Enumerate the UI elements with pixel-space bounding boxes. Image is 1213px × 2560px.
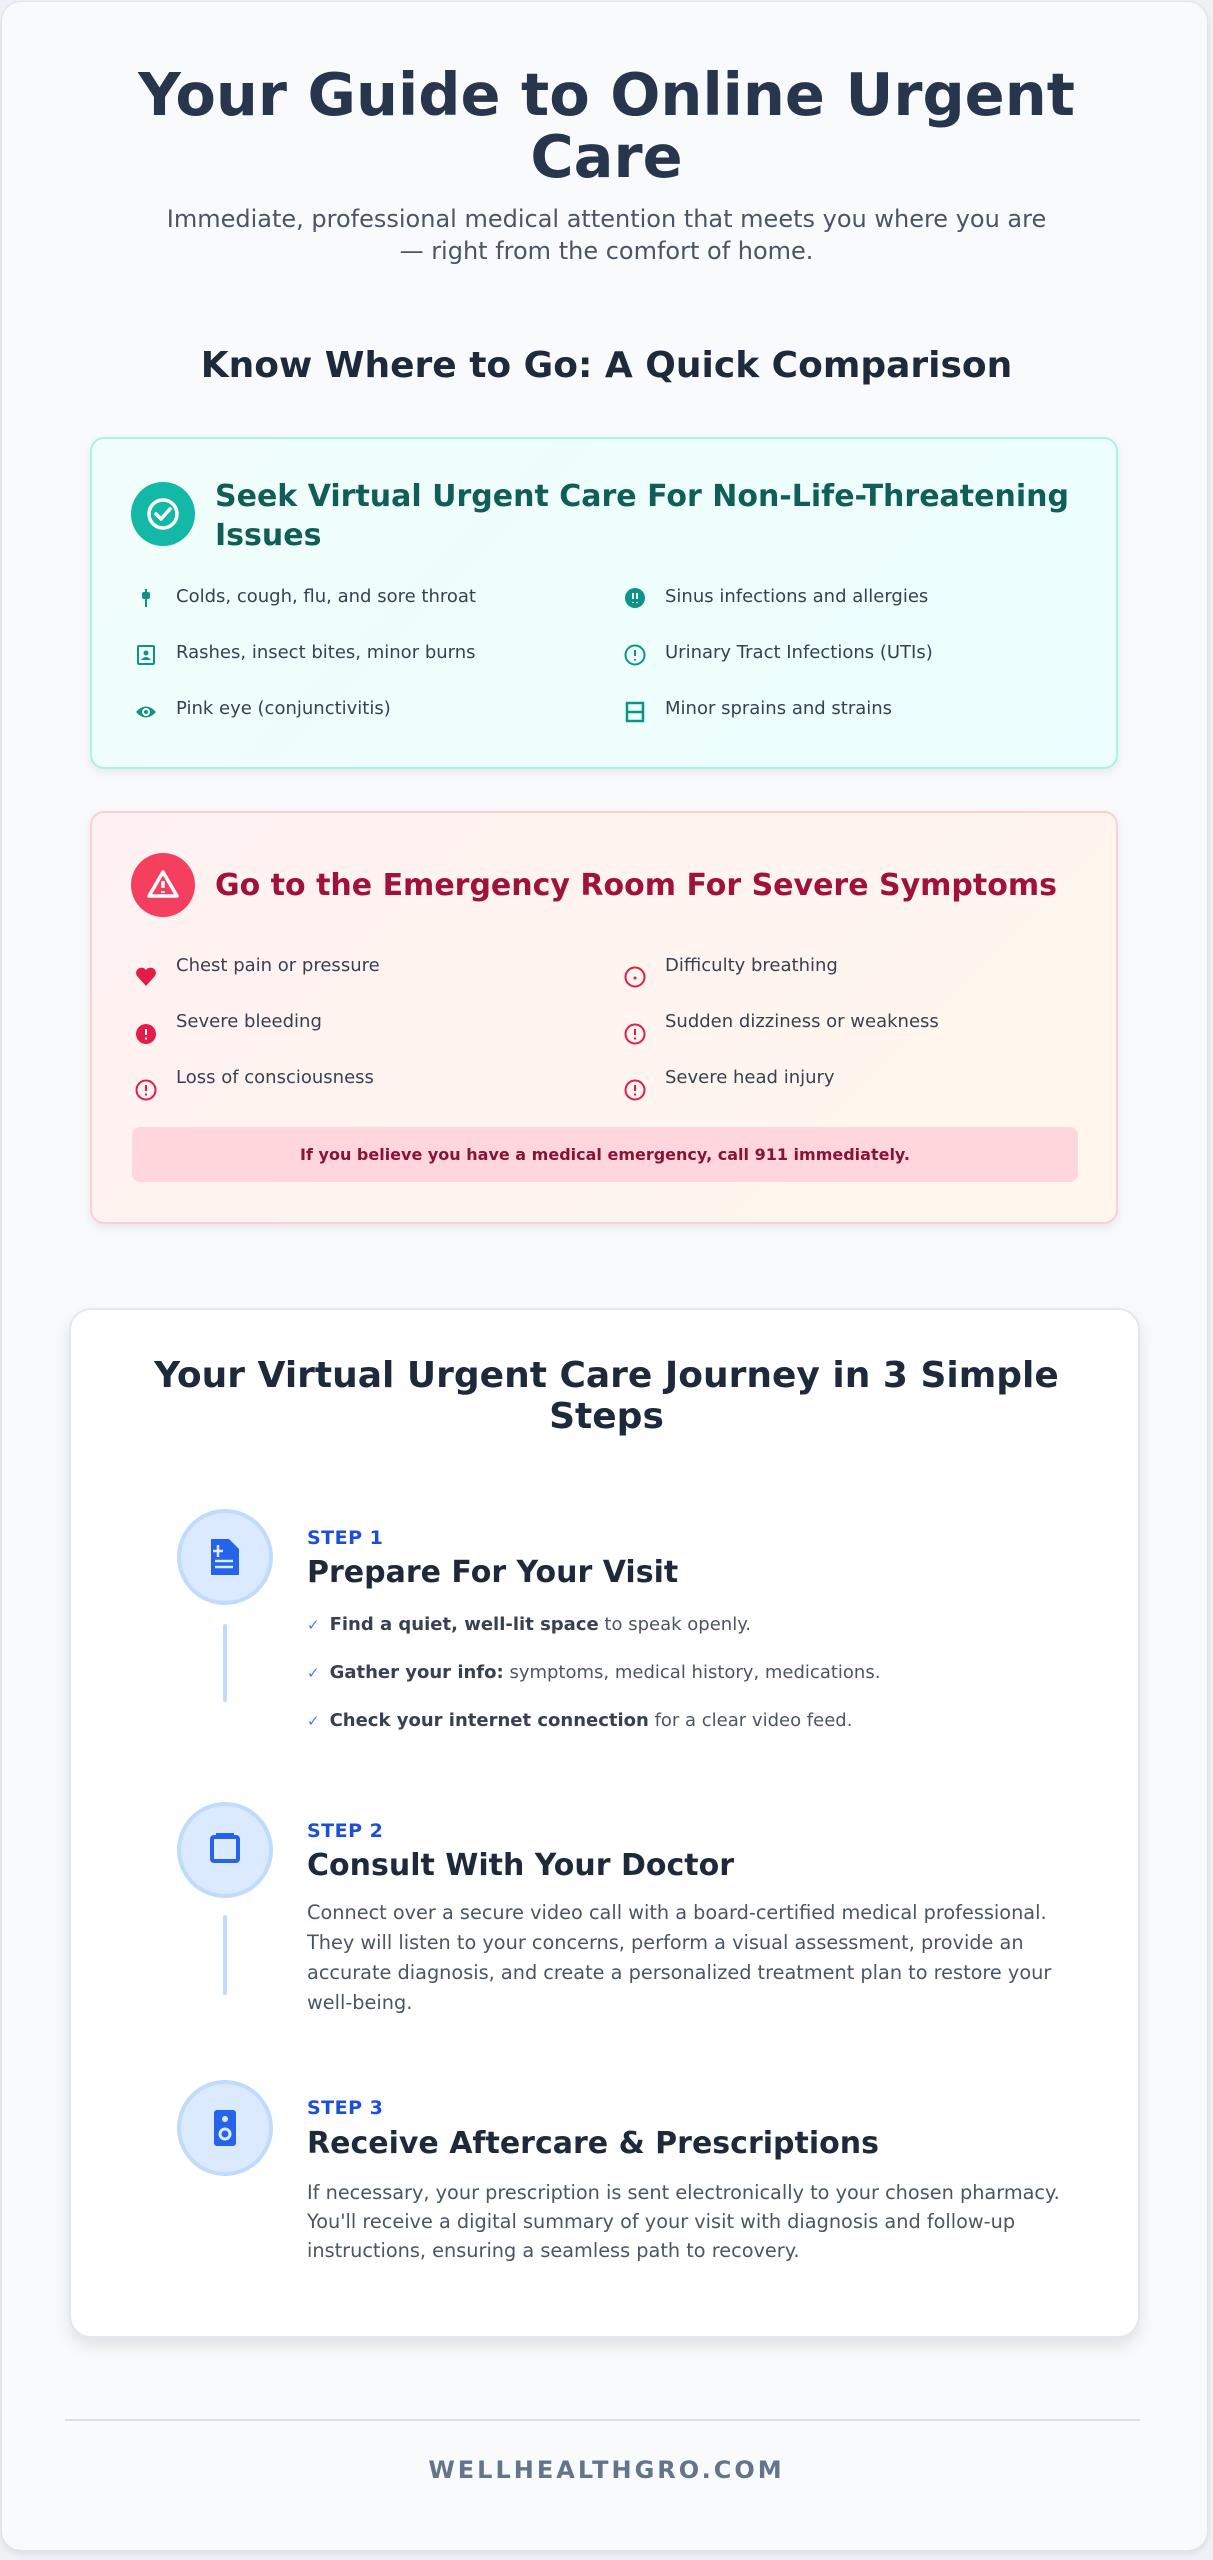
list: urgent care conditions: Rashes, insect bites, minor burns	[176, 642, 476, 663]
panel: emergency room	[90, 811, 1118, 1224]
icon: warning	[131, 853, 195, 917]
step 2: Consult With Your Doctor	[307, 1848, 734, 1883]
list: emergency symptoms: Sudden dizziness or weakness	[665, 1011, 939, 1032]
list: emergency symptoms: Chest pain or pressure	[176, 955, 380, 976]
step 1: ✓ Check your internet connection for a clear video feed.	[307, 1710, 852, 1731]
panel title: Seek Virtual Urgent Care For Non-Life-Threatening Issues	[215, 479, 1069, 553]
list: emergency symptoms	[136, 955, 939, 1100]
list: urgent care conditions	[136, 586, 933, 722]
list: urgent care conditions: Minor sprains and strains	[665, 698, 892, 719]
title: Your Guide to Online Urgent Care	[138, 60, 1075, 191]
step 3: Receive Aftercare & Prescriptions	[307, 2126, 879, 2161]
step 3: If necessary, your prescription is sent electronically to your chosen pharmacy. You'll receive a digital summary of your visit with diagnosis and follow-up instructions, ensuring a seamless path to recovery.	[307, 2181, 1060, 2262]
panel title: Go to the Emergency Room For Severe Symptoms	[215, 868, 1057, 903]
step 1: Prepare For Your Visit	[307, 1555, 678, 1590]
icon: video window	[177, 1802, 273, 1898]
panel: journey steps	[69, 1308, 1140, 2338]
list: urgent care conditions: Urinary Tract Infections (UTIs)	[665, 642, 933, 663]
list: emergency symptoms: Severe bleeding	[176, 1011, 322, 1032]
list: emergency symptoms: Difficulty breathing	[665, 955, 838, 976]
footer brand: WELLHEALTHGRO.COM	[428, 2456, 785, 2484]
journey heading: Your Virtual Urgent Care Journey in 3 Simple Steps	[154, 1355, 1059, 1437]
step 1	[177, 1509, 880, 1731]
list: urgent care conditions: Pink eye (conjunctivitis)	[176, 698, 391, 719]
icon: speaker device	[177, 2080, 273, 2176]
step 3	[177, 2080, 1060, 2262]
step 1: ✓ Find a quiet, well-lit space to speak openly.	[307, 1614, 751, 1635]
step 2: Connect over a secure video call with a board-certified medical professional. They will listen to your concerns, perform a visual assessment, provide an accurate diagnosis, and create a personalized treatment plan to restore your well-being.	[307, 1901, 1051, 2014]
list: urgent care conditions: Colds, cough, flu, and sore throat	[176, 586, 476, 607]
icon: document	[177, 1509, 273, 1605]
subtitle	[167, 205, 1046, 265]
section heading: comparison: Know Where to Go: A Quick Comparison	[201, 345, 1012, 386]
step 2: STEP 2	[307, 1820, 383, 1842]
subtitle: — right from the comfort of home.	[400, 237, 813, 265]
step 1: ✓ Gather your info: symptoms, medical history, medications.	[307, 1662, 880, 1683]
subtitle: Immediate, professional medical attention that meets you where you are	[167, 205, 1046, 233]
callout: call 911	[132, 1127, 1078, 1182]
step 1: STEP 1	[307, 1527, 383, 1549]
list: emergency symptoms: Severe head injury	[665, 1067, 835, 1088]
step 3: STEP 3	[307, 2097, 383, 2119]
panel: virtual urgent care	[90, 437, 1118, 769]
callout: call 911: If you believe you have a medical emergency, call 911 immediately.	[300, 1145, 910, 1164]
list: emergency symptoms: Loss of consciousness	[176, 1067, 374, 1088]
list: urgent care conditions: Sinus infections and allergies	[665, 586, 928, 607]
icon: check circle	[131, 482, 195, 546]
step 2	[177, 1802, 1052, 2014]
